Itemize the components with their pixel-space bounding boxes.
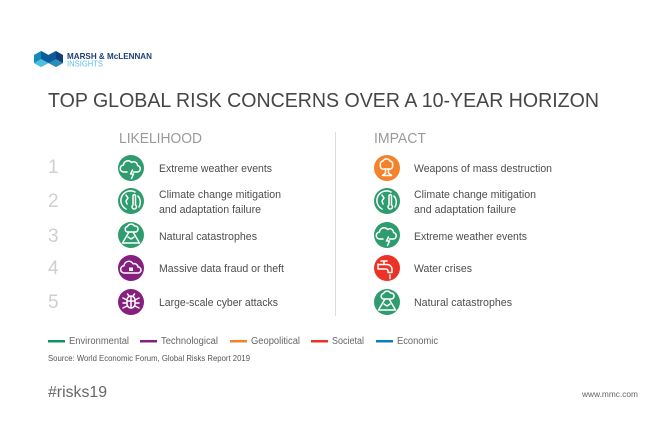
icon: water crises <box>374 255 400 281</box>
legend: Environmental <box>69 336 129 347</box>
rank numbers: 1 <box>48 157 59 178</box>
legend: Geopolitical <box>251 336 300 347</box>
icon: weapons of mass destruction <box>374 155 400 181</box>
heading: likelihood: LIKELIHOOD <box>119 130 202 147</box>
hashtag: #risks19 <box>48 384 107 401</box>
label: extreme weather events: Extreme weather events <box>159 163 272 175</box>
rank numbers: 2 <box>48 191 59 212</box>
label: massive data fraud: Massive data fraud or theft <box>159 263 284 275</box>
rank numbers: 4 <box>48 258 59 279</box>
icon: extreme weather <box>118 155 144 181</box>
label: climate change mitigation <box>414 189 536 216</box>
legend: Societal <box>332 336 364 347</box>
label: water crises: Water crises <box>414 263 472 275</box>
label: climate change mitigation: Climate change mitigation <box>414 189 536 201</box>
legend <box>48 336 438 347</box>
icon: data fraud <box>118 255 144 281</box>
rank numbers <box>48 157 59 313</box>
icon: extreme weather <box>374 222 400 248</box>
logo: Marsh & McLennan Insights: INSIGHTS <box>67 60 103 68</box>
rank numbers: 5 <box>48 292 59 313</box>
icon: climate change <box>118 188 144 214</box>
icon: cyber attacks <box>118 289 144 315</box>
panel: likelihood <box>48 130 284 315</box>
label: natural catastrophes: Natural catastrophes <box>159 231 257 243</box>
divider <box>334 132 336 316</box>
label: cyber attacks: Large-scale cyber attacks <box>159 297 278 309</box>
icon: climate change <box>374 188 400 214</box>
panel: impact <box>374 130 552 315</box>
label: climate change mitigation <box>159 189 281 216</box>
website: www.mmc.com <box>581 389 638 399</box>
icon: natural catastrophes <box>374 289 400 315</box>
logo: Marsh & McLennan Insights: MARSH & McLENNAN <box>67 51 152 61</box>
legend: Technological <box>161 336 218 347</box>
title: TOP GLOBAL RISK CONCERNS OVER A 10-YEAR HORIZON <box>48 89 599 112</box>
label: climate change mitigation: and adaptation failure <box>159 204 261 216</box>
label: climate change mitigation: and adaptation failure <box>414 204 516 216</box>
label: extreme weather events: Extreme weather events <box>414 231 527 243</box>
label: climate change mitigation: Climate change mitigation <box>159 189 281 201</box>
legend: Economic <box>397 336 438 347</box>
rank numbers: 3 <box>48 226 59 247</box>
logo: Marsh & McLennan Insights <box>34 51 152 68</box>
icon: natural catastrophes <box>118 222 144 248</box>
label: natural catastrophes: Natural catastrophes <box>414 297 512 309</box>
label: weapons of mass destruction: Weapons of mass destruction <box>414 163 552 175</box>
source note: Source: World Economic Forum, Global Risks Report 2019 <box>48 354 250 363</box>
heading: impact: IMPACT <box>374 130 426 147</box>
